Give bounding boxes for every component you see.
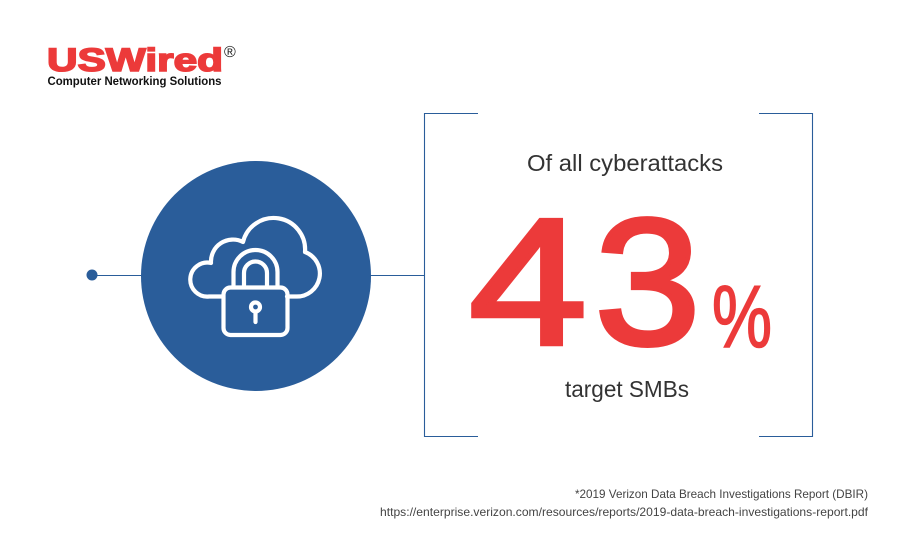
statistic: 43%: %: [712, 267, 772, 366]
source citation: [380, 487, 869, 519]
statistic: 43%: 3: [594, 182, 701, 383]
subheading: target SMBs: target SMBs: [565, 376, 689, 402]
logo: USWired: [47, 42, 236, 88]
bracket frame: [424, 114, 812, 436]
logo: USWired: Computer Networking Solutions: [48, 76, 222, 88]
connector line with dot: [86, 270, 425, 280]
heading: Of all cyberattacks: Of all cyberattacks: [527, 150, 723, 176]
source citation: *2019 Verizon Data Breach Investigations Report (DBIR): [575, 487, 868, 501]
blue circle with cloud lock icon: [141, 161, 371, 391]
source citation: https://enterprise.verizon.com/resources/reports/2019-data-breach-investigations-report.pdf: [380, 505, 869, 519]
icon: cloud and padlock: [190, 218, 320, 335]
statistic: 43%: 4: [469, 181, 587, 382]
logo: USWired: USWired: [47, 42, 223, 78]
logo: USWired: ®: [224, 44, 236, 61]
statistic: 43%: [469, 181, 772, 383]
